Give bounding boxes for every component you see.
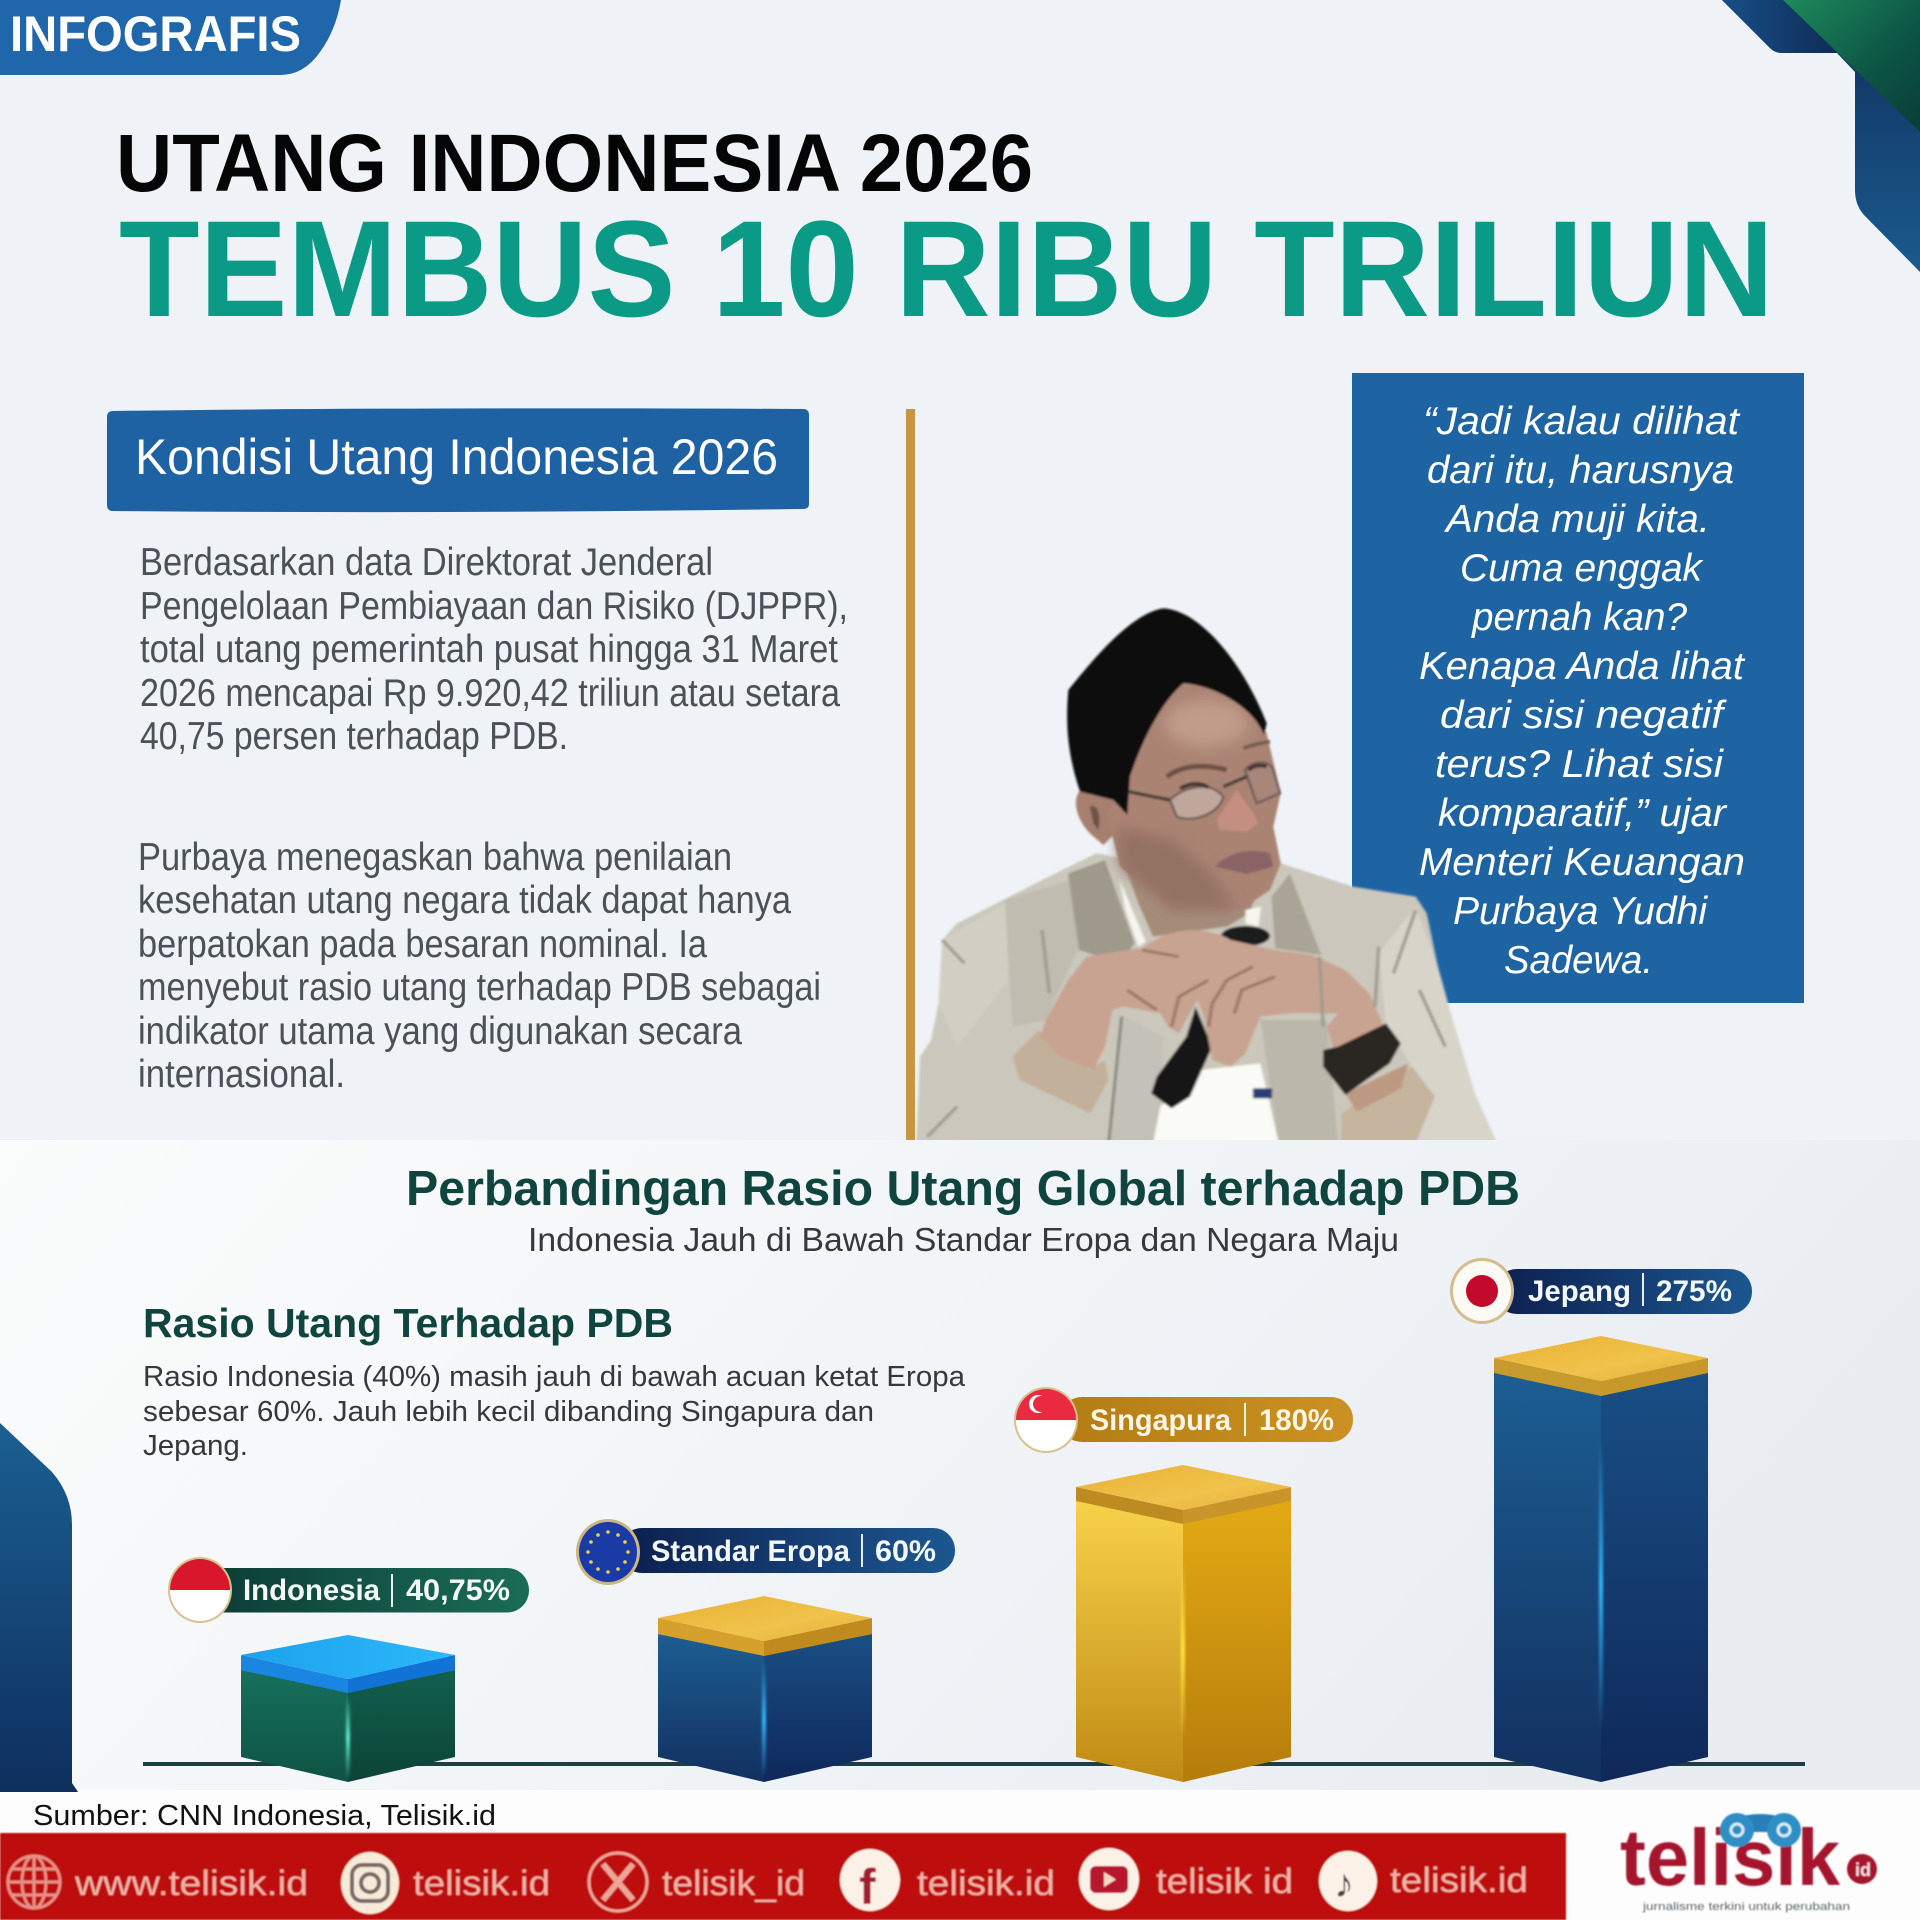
bar: Jepang (1494, 1336, 1708, 1782)
icon: X (589, 1853, 647, 1911)
badge: INFOGRAFIS (0, 0, 341, 75)
label: Jepang 275% (1450, 1258, 1752, 1324)
panel: quote: Menteri Keuangan (1419, 841, 1745, 884)
flag: Indonesia (168, 1557, 232, 1623)
label: Standar Eropa 60% (576, 1519, 955, 1585)
panel: quote: pernah kan? (1471, 596, 1687, 639)
vertical divider (906, 409, 915, 1140)
text block: chart description (143, 1361, 966, 1462)
panel: quote: Purbaya Yudhi (1453, 890, 1708, 933)
footer social bar: www.telisik.id (74, 1864, 308, 1903)
photo: jacket, shirt and hands (916, 853, 1497, 1143)
logo: telisik.id: id (1855, 1860, 1871, 1880)
panel: quote: Anda muji kita. (1444, 498, 1710, 541)
photo: Menteri Keuangan Purbaya (916, 608, 1497, 1143)
footer social bar: telisik.id (1390, 1861, 1528, 1900)
text block: chart description: Jepang. (143, 1430, 248, 1462)
text block: chart description: Rasio Indonesia (40%) masih jauh di bawah acuan ketat Eropa (143, 1361, 966, 1393)
label: Singapura 180%: Singapura (1090, 1404, 1231, 1437)
bar: Indonesia (241, 1635, 455, 1782)
panel: quote: dari sisi negatif (1440, 694, 1728, 737)
title (116, 118, 1774, 346)
panel: Kondisi heading (107, 408, 809, 512)
title: UTANG INDONESIA 2026 (116, 118, 1033, 209)
label: Standar Eropa 60%: Standar Eropa (651, 1535, 850, 1568)
icon: tiktok: ♪ (1334, 1862, 1354, 1906)
label: Singapura 180%: 180% (1259, 1404, 1334, 1437)
text block: paragraph 2: menyebut rasio utang terhadap PDB sebagai (138, 966, 821, 1009)
panel: quote: komparatif,” ujar (1438, 792, 1728, 835)
text block: paragraph 2: kesehatan utang negara tidak dapat hanya (138, 879, 792, 922)
label: Jepang 275%: Jepang (1528, 1275, 1631, 1308)
icon: facebook: f (859, 1859, 876, 1915)
panel: quote: Sadewa. (1504, 939, 1653, 982)
label: Indonesia 40,75% (168, 1557, 529, 1623)
bar: Singapura (1076, 1465, 1291, 1782)
footer social bar (0, 1833, 1566, 1920)
logo: telisik.id: telisik (1620, 1813, 1840, 1902)
text block: paragraph 2: internasional. (138, 1053, 345, 1096)
chart baseline (143, 1762, 1805, 1766)
decoration: top right corner (1722, 0, 1920, 272)
panel: quote: dari itu, harusnya (1427, 449, 1734, 492)
label: Standar Eropa 60%: 60% (875, 1535, 936, 1568)
badge: INFOGRAFIS: INFOGRAFIS (10, 6, 301, 62)
label: Jepang 275%: 275% (1656, 1275, 1732, 1308)
text block: paragraph 1: 2026 mencapai Rp 9.920,42 triliun atau setara (140, 672, 841, 715)
chart heading: Rasio Utang Terhadap PDB: Rasio Utang Terhadap PDB (143, 1300, 673, 1346)
bottom white strip (0, 1790, 1920, 1920)
panel: Kondisi heading: Kondisi Utang Indonesia 2026 (135, 429, 778, 485)
flag: Uni Eropa (576, 1519, 640, 1585)
heading: chart section: Perbandingan Rasio Utang Global terhadap PDB (406, 1162, 1520, 1216)
icon: tiktok (1319, 1851, 1377, 1911)
logo: telisik.id: jurnalisme terkini untuk perubahan (1642, 1901, 1850, 1913)
label: Indonesia 40,75%: Indonesia (243, 1574, 380, 1607)
decoration: left side shape (0, 1423, 78, 1792)
panel: quote (1352, 373, 1804, 1003)
flag: Singapura (1014, 1387, 1078, 1453)
text block: paragraph 2 (138, 836, 821, 1096)
subheading: chart section: Indonesia Jauh di Bawah Standar Eropa dan Negara Maju (528, 1221, 1399, 1258)
icon: website globe (8, 1856, 60, 1908)
title: TEMBUS 10 RIBU TRILIUN (119, 193, 1774, 346)
source note: Sumber: CNN Indonesia, Telisik.id (33, 1800, 496, 1832)
icon: youtube (1079, 1848, 1139, 1910)
text block: paragraph 1: 40,75 persen terhadap PDB. (140, 715, 568, 758)
footer social bar: telisik_id (662, 1864, 805, 1903)
panel: quote: terus? Lihat sisi (1435, 743, 1724, 786)
panel: quote: “Jadi kalau dilihat (1423, 400, 1741, 443)
footer social bar: telisik.id (917, 1864, 1055, 1903)
text block: paragraph 1: total utang pemerintah pusat hingga 31 Maret (140, 628, 838, 671)
lower section background (0, 1140, 1920, 1792)
panel: quote: Kenapa Anda lihat (1419, 645, 1746, 688)
bar: Standar Eropa (658, 1596, 872, 1782)
text block: paragraph 2: berpatokan pada besaran nominal. Ia (138, 923, 708, 966)
label: Singapura 180% (1014, 1387, 1353, 1453)
text block: paragraph 1: Berdasarkan data Direktorat Jenderal (140, 541, 713, 584)
panel: quote: Cuma enggak (1460, 547, 1704, 590)
footer social bar: telisik.id (413, 1864, 550, 1903)
text block: chart description: sebesar 60%. Jauh lebih kecil dibanding Singapura dan (143, 1396, 874, 1428)
text block: paragraph 2: indikator utama yang digunakan secara (138, 1010, 743, 1053)
text block: paragraph 1 (140, 541, 848, 758)
text block: paragraph 2: Purbaya menegaskan bahwa penilaian (138, 836, 732, 879)
label: Indonesia 40,75%: 40,75% (406, 1574, 510, 1607)
photo: head and glasses (1067, 608, 1281, 910)
flag: Jepang (1450, 1258, 1514, 1324)
footer social bar: telisik id (1156, 1862, 1293, 1901)
text block: paragraph 1: Pengelolaan Pembiayaan dan Risiko (DJPPR), (140, 585, 848, 628)
icon: facebook (840, 1849, 900, 1915)
icon: instagram (341, 1852, 399, 1914)
